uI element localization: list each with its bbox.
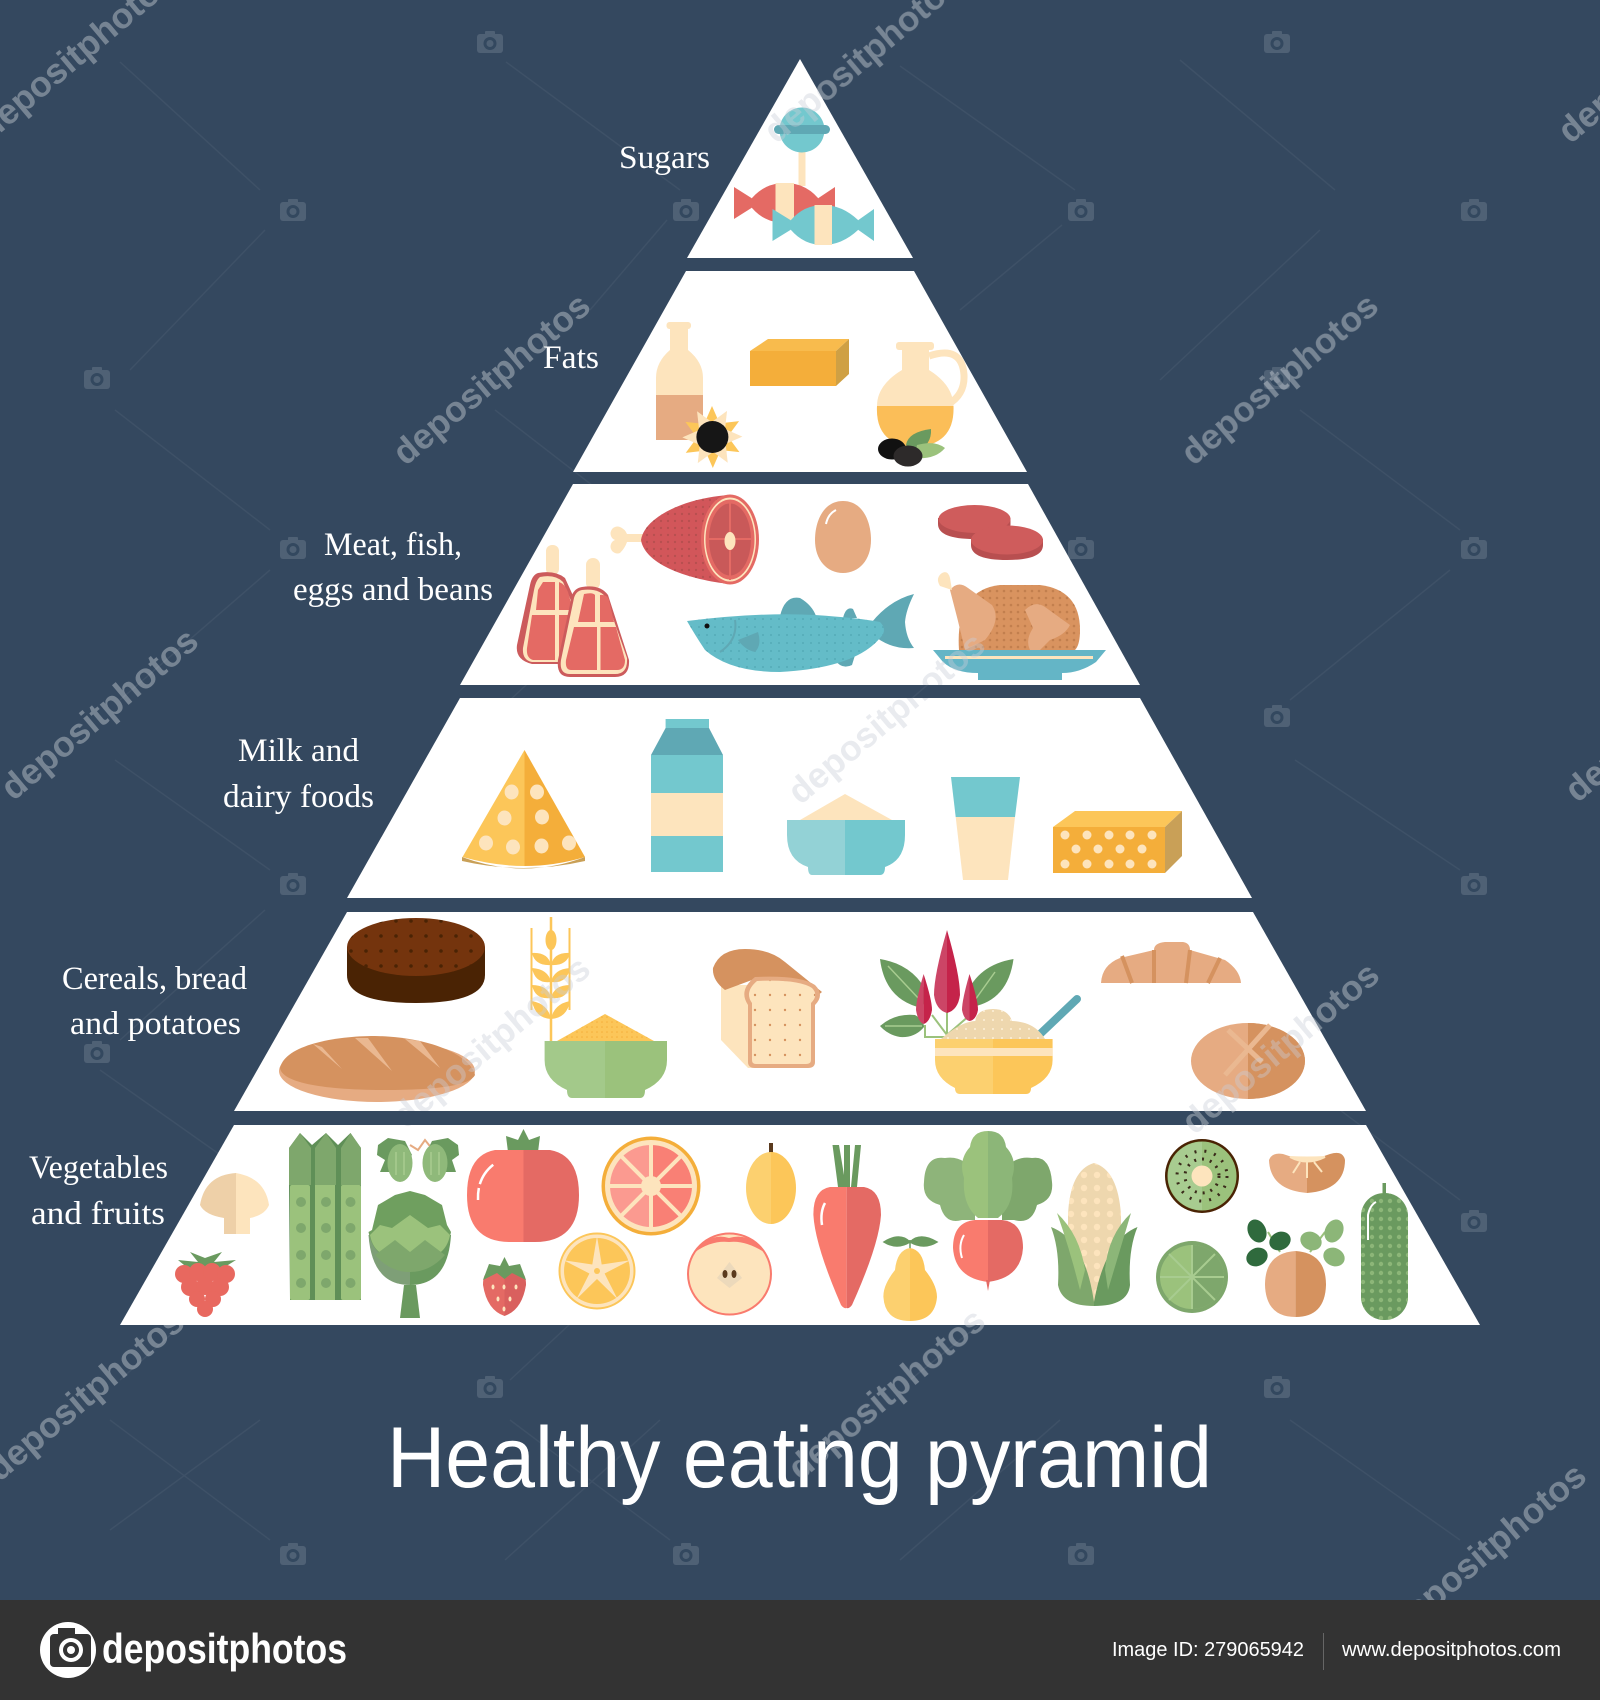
watermark over pyramid: depositphotos: [780, 624, 993, 812]
icon: peach with leaves: [1243, 1216, 1348, 1317]
icon: roast chicken on plate: [933, 572, 1106, 680]
icon: cucumber: [1361, 1183, 1408, 1320]
icon: wheat: [532, 917, 570, 1042]
panel: sugars tier: [687, 59, 913, 258]
icon: carrot: [813, 1145, 881, 1308]
icon: dark cake: [347, 918, 485, 1003]
icon: round bread: [1191, 1023, 1305, 1099]
icon: butter: [750, 339, 849, 386]
icon: radish with leaves: [924, 1131, 1052, 1291]
icon: milk carton: [651, 719, 723, 872]
label: Cereals, bread and potatoes: and potatoes: [70, 1006, 241, 1042]
icon: egg: [815, 501, 871, 573]
watermark over pyramid: depositphotos: [385, 948, 598, 1136]
icon: ham: [611, 494, 759, 584]
icon: cheese wedge: [462, 750, 585, 868]
icon: teal candy: [772, 205, 874, 245]
panel: vegetables and fruits tier: [120, 1125, 1480, 1325]
website url: www.depositphotos.com: [1341, 1639, 1561, 1661]
icon: meat chops: [517, 545, 629, 677]
label: Vegetables and fruits: Vegetables: [29, 1150, 168, 1186]
panel: fats tier: [573, 271, 1027, 472]
icon: gooseberries: [377, 1138, 459, 1182]
icon: cheese block: [1053, 811, 1182, 873]
watermark pattern: depositphotos: [1381, 1455, 1594, 1643]
logo wordmark: depositphotos: [102, 1625, 347, 1672]
icon: olives: [878, 429, 945, 466]
watermark pattern: depositphotos: [385, 285, 598, 473]
icon: bowl of grain: [545, 1014, 667, 1098]
label: Cereals, bread and potatoes: Cereals, bread: [62, 961, 247, 997]
icon: burger patties: [938, 505, 1043, 560]
icon: lollipop: [774, 108, 830, 186]
icon: tomato: [467, 1129, 579, 1242]
label: Meat, fish, eggs and beans: [293, 527, 493, 608]
icon: strawberry: [483, 1257, 526, 1316]
label: Milk and dairy foods: dairy foods: [223, 779, 374, 815]
label: Vegetables and fruits: [29, 1150, 168, 1232]
icon: corn: [1051, 1163, 1138, 1306]
icon: asparagus: [289, 1133, 361, 1300]
icon: chili and leaves: [880, 930, 1014, 1037]
icon: bottle: [656, 322, 703, 440]
label: Sugars: Sugars: [619, 140, 710, 176]
footer bar: [0, 1600, 1600, 1700]
label: Vegetables and fruits: and fruits: [31, 1196, 165, 1232]
panel: milk and dairy foods tier: [347, 698, 1252, 898]
label: Milk and dairy foods: Milk and: [238, 733, 360, 769]
icon: orange slice: [560, 1234, 634, 1308]
label: Fats: Fats: [543, 340, 599, 376]
watermark over pyramid: [385, 0, 1387, 1488]
watermark pattern: depositphotos: [1174, 954, 1387, 1142]
watermark over pyramid: depositphotos: [1174, 954, 1387, 1142]
icon: grapefruit slice: [602, 1136, 700, 1236]
title: Healthy eating pyramid: [387, 1410, 1212, 1506]
icon: raspberry: [175, 1252, 236, 1317]
icon: apple half: [688, 1234, 771, 1314]
icon: camera logo: [40, 1622, 96, 1678]
image id: Image ID: 279065942: [1112, 1639, 1304, 1661]
panel: meat, fish, eggs and beans tier: [460, 484, 1140, 685]
icon: pear: [883, 1237, 937, 1321]
icon: bowl of flour: [787, 794, 905, 875]
icon: oil jug: [877, 342, 964, 447]
icon: glass of milk: [951, 777, 1020, 880]
watermark pattern: depositphotos: [1173, 285, 1386, 473]
icon: mushroom: [200, 1173, 269, 1234]
label: Cereals, bread and potatoes: [62, 961, 247, 1042]
icon: sunflower: [682, 406, 743, 468]
label: Milk and dairy foods: [223, 733, 374, 815]
icon: long bread loaf: [279, 1036, 475, 1102]
icon: red candy: [734, 183, 835, 223]
watermark pattern: depositphotos: [780, 1300, 993, 1488]
icon: kiwi: [1165, 1139, 1239, 1213]
icon: fish: [687, 594, 914, 672]
icon: croissant: [1101, 942, 1241, 983]
icon: lime slice: [1156, 1241, 1228, 1313]
icon: sliced bread: [713, 949, 822, 1068]
icon: artichoke: [368, 1191, 451, 1318]
watermark over pyramid: depositphotos: [780, 1300, 993, 1488]
label: Meat, fish, eggs and beans: eggs and beans: [293, 572, 493, 608]
icon: porridge bowl with spoon: [935, 999, 1077, 1094]
icon: mandarin segment: [1269, 1153, 1345, 1193]
panel: cereals, bread and potatoes tier: [234, 912, 1366, 1111]
icon: yellow fruit: [746, 1143, 796, 1224]
label: Meat, fish, eggs and beans: Meat, fish,: [324, 527, 462, 563]
